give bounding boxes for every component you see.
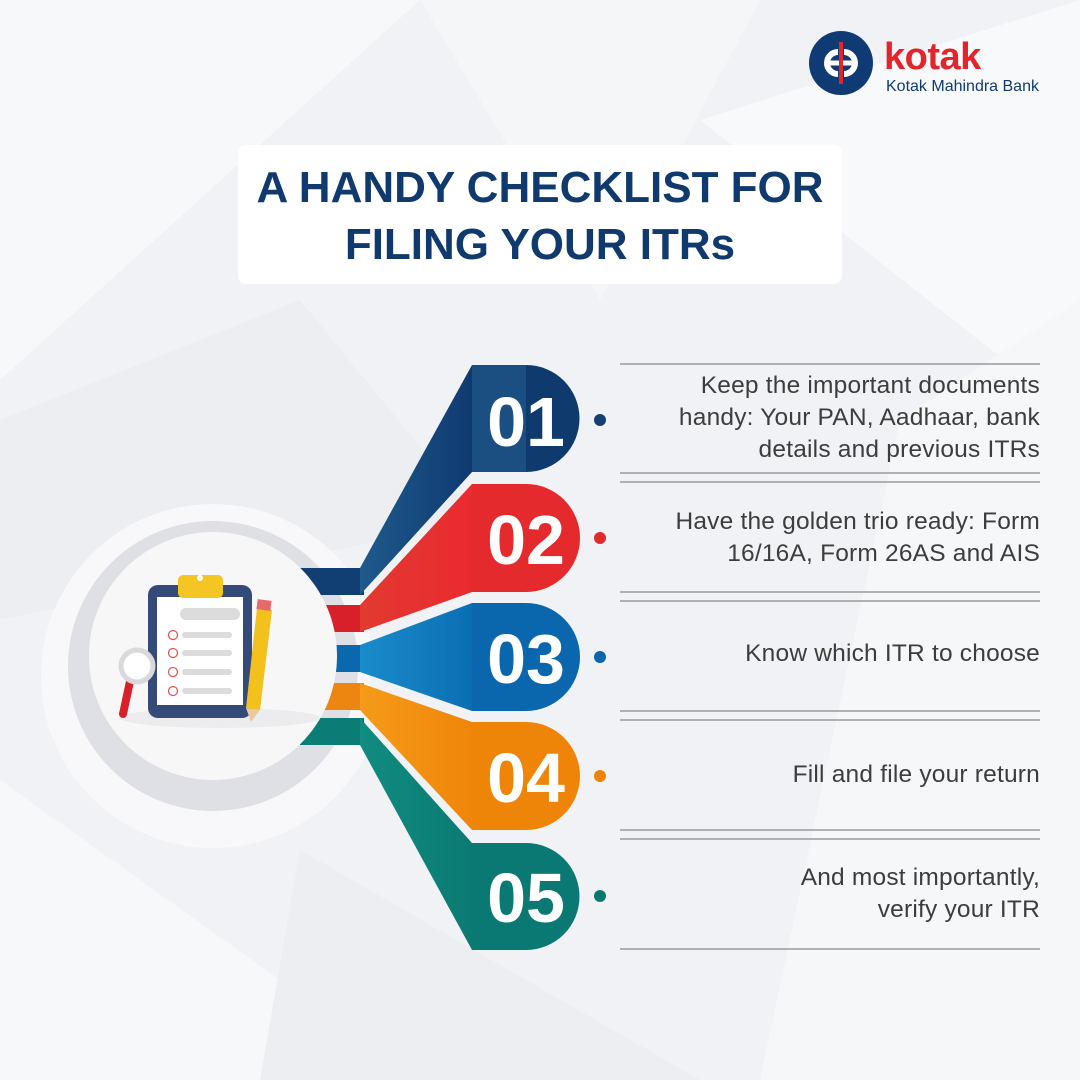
step 05 [360,718,606,950]
text 02 [675,508,1040,567]
logo: Kotak Mahindra Bank [886,78,1039,95]
step 05: 05 [487,859,565,937]
magnifier [123,672,132,714]
text 04: Fill and file your return [793,761,1040,788]
text 03: Know which ITR to choose [745,640,1040,667]
text 05: verify your ITR [878,896,1040,923]
pencil [246,608,272,710]
logo [809,31,1039,95]
step 02 [360,484,606,632]
title: FILING YOUR ITRs [345,220,735,269]
step 04: 04 [487,739,565,817]
text 02: 16/16A, Form 26AS and AIS [727,540,1040,567]
clipboard [148,585,252,718]
title: A HANDY CHECKLIST FOR [256,163,824,212]
text 01: handy: Your PAN, Aadhaar, bank [679,404,1040,431]
text 01: Keep the important documents [701,372,1040,399]
logo: kotak [884,36,981,78]
step 01: 01 [487,383,565,461]
text 01: details and previous ITRs [759,436,1040,463]
stripes [300,568,364,595]
text 01 [679,372,1040,463]
text 02: Have the golden trio ready: Form [675,508,1040,535]
step 02: 02 [487,501,565,579]
step 04 [360,683,606,830]
circle with clipboard icon [55,504,364,811]
text 05: And most importantly, [801,864,1040,891]
step 03 [360,603,606,711]
step 03: 03 [487,620,565,698]
text 05 [800,864,1040,923]
title [238,145,842,284]
step 01 [360,365,606,595]
